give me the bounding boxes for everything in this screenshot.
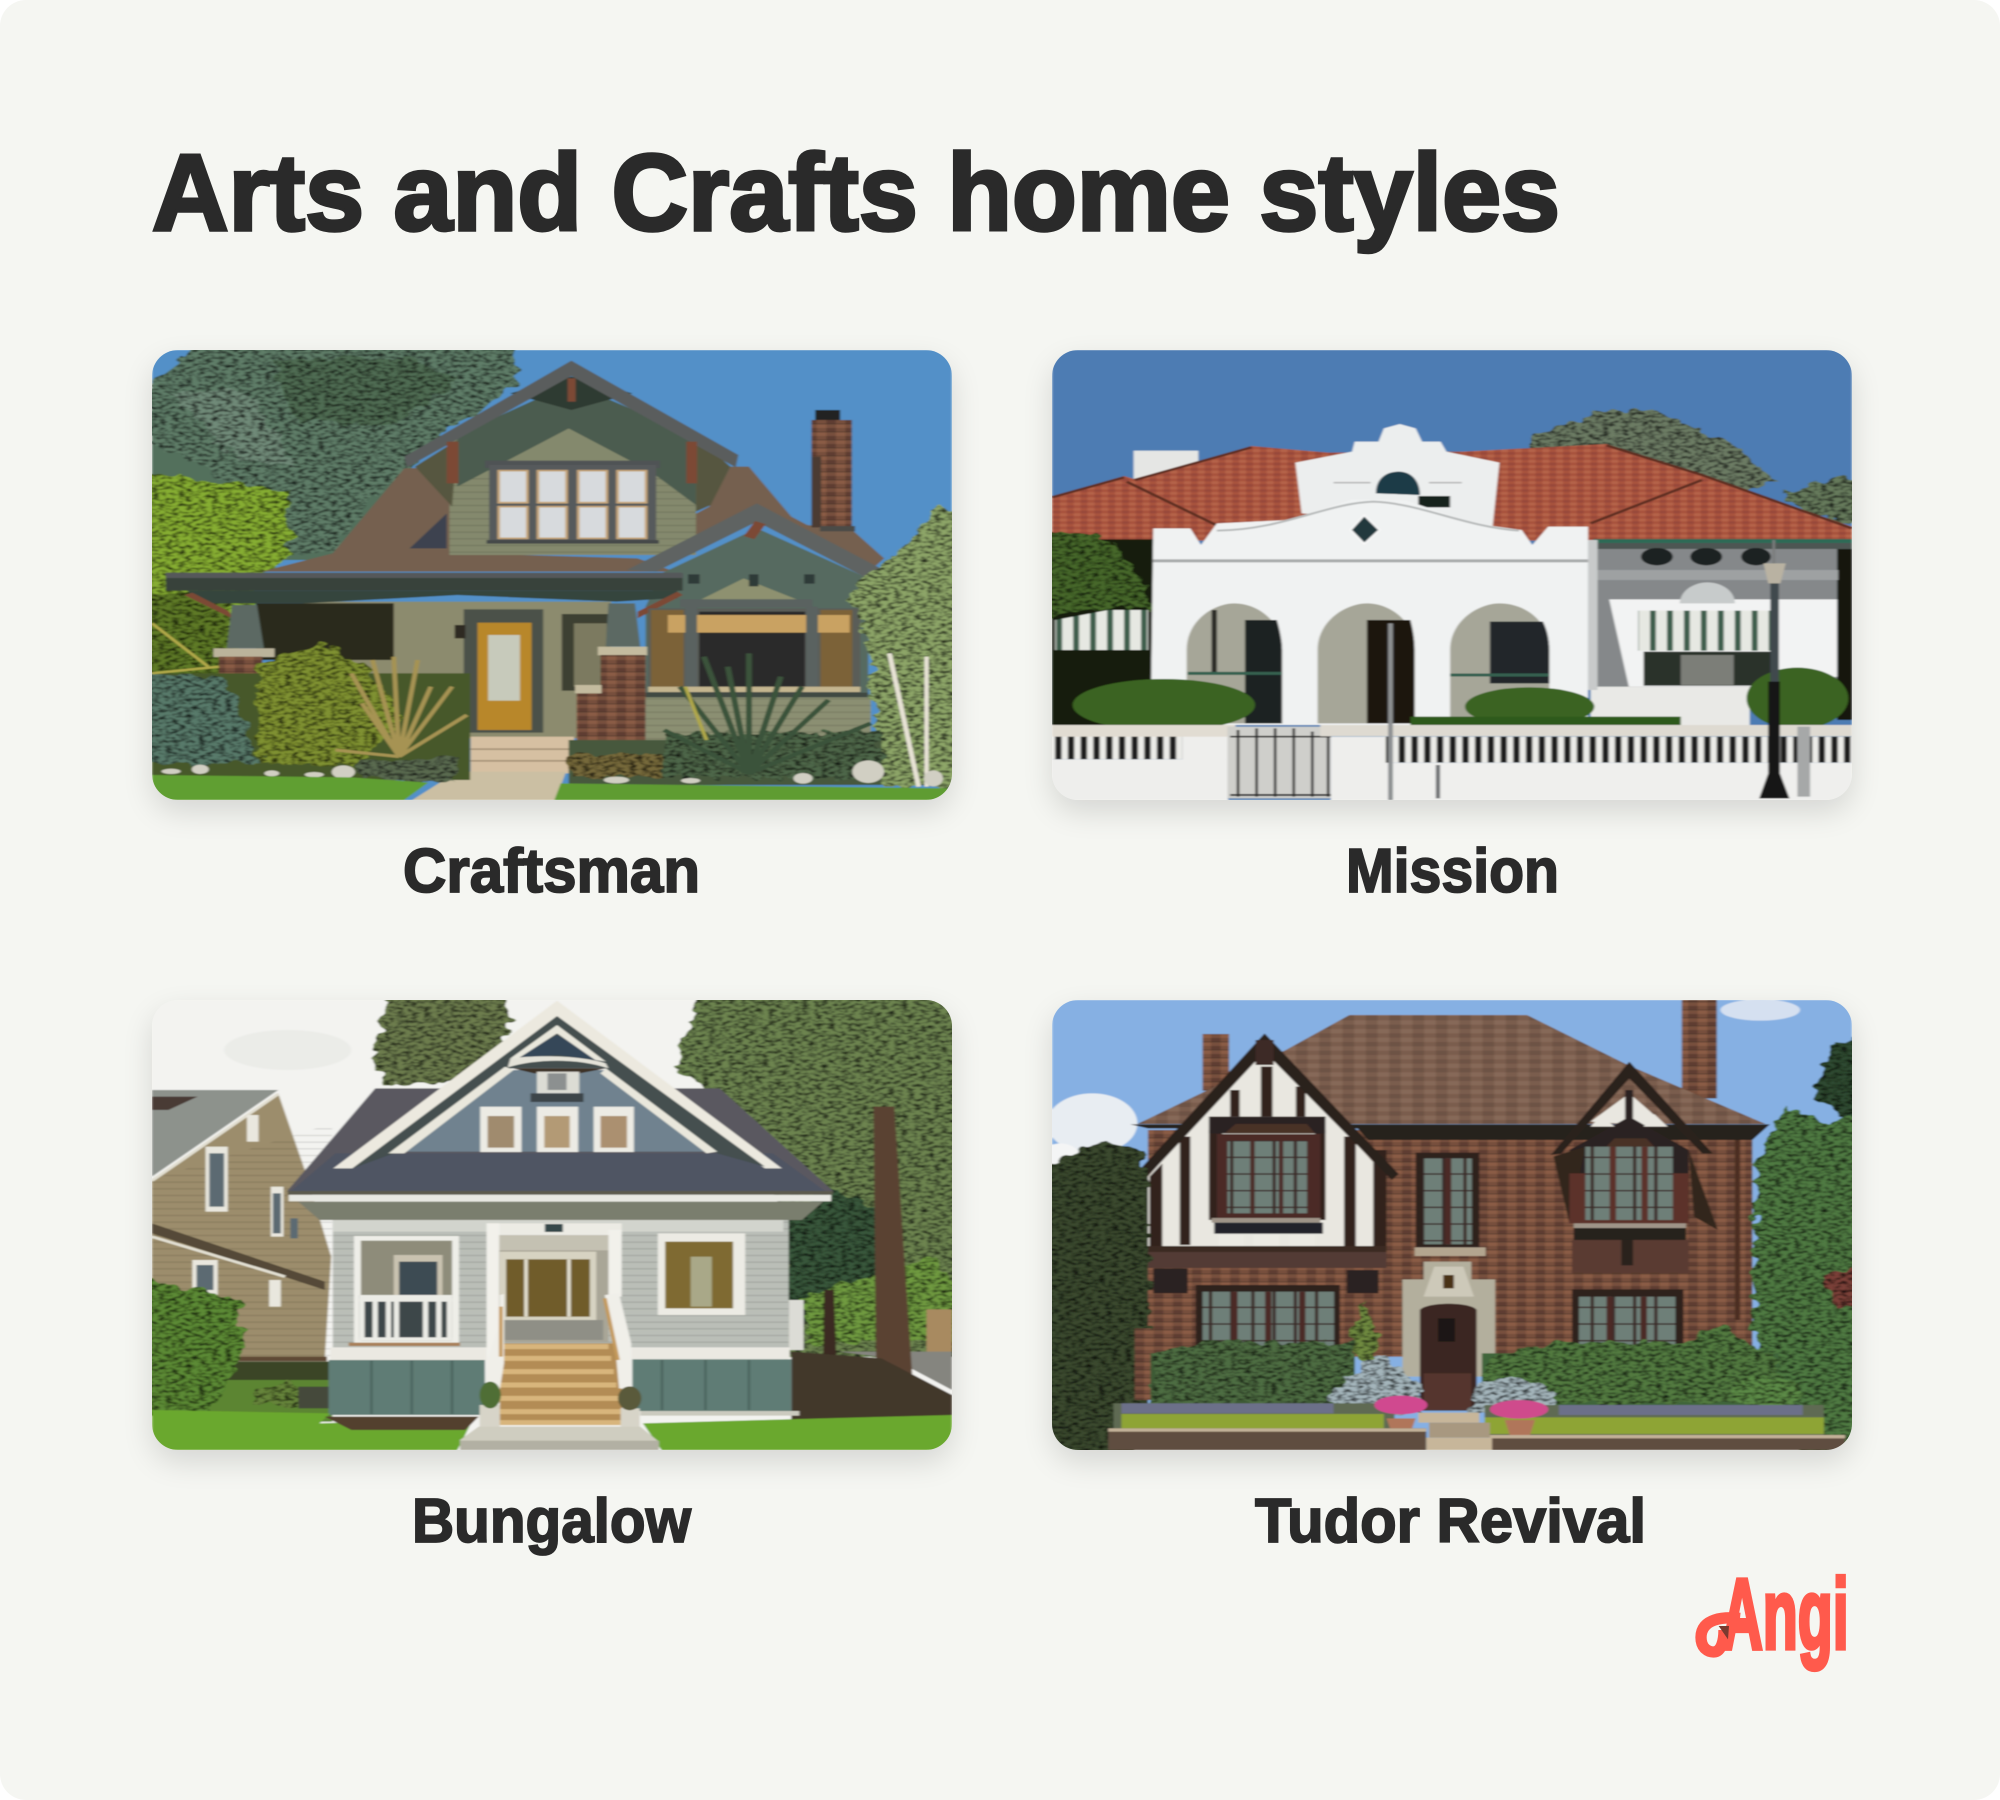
sky and clouds	[1039, 999, 1852, 1450]
main roof	[261, 467, 675, 572]
logo: Angi	[1695, 1559, 1849, 1672]
right lower window	[1572, 1289, 1683, 1349]
white balustrade wall	[1052, 725, 1852, 800]
pine trunk	[874, 1107, 912, 1375]
flower pots	[480, 1382, 641, 1428]
main gable	[333, 1001, 782, 1168]
gable windows	[480, 1072, 634, 1152]
right gable	[1551, 1062, 1718, 1230]
ground	[791, 1352, 952, 1421]
green bush left	[134, 473, 293, 707]
right upper window	[1569, 1147, 1689, 1273]
left gable window	[1212, 1134, 1323, 1246]
lawn left bushes	[129, 1277, 332, 1422]
photo: Craftsman house	[152, 350, 952, 800]
stone wall and steps	[1108, 1413, 1845, 1450]
label: Bungalow: Bungalow	[412, 1487, 692, 1556]
background trees	[1527, 410, 1888, 527]
lower left window	[1196, 1285, 1340, 1348]
photo: Bungalow house	[152, 1000, 952, 1450]
entrance surround	[1402, 1262, 1495, 1411]
grass and concrete walk	[152, 1410, 952, 1450]
eucalyptus tree	[145, 343, 516, 560]
shrubs	[1151, 1300, 1800, 1413]
right gable	[627, 503, 887, 698]
fence and road	[839, 1309, 952, 1390]
lamp post and sign posts	[1388, 540, 1810, 800]
label: Mission: Mission	[1346, 837, 1559, 906]
left palm and awning	[1034, 532, 1154, 726]
shrubs	[1073, 668, 1848, 731]
porch columns	[213, 603, 647, 747]
dormer windows	[485, 461, 660, 544]
right window	[658, 1233, 745, 1315]
porch roof	[166, 573, 683, 618]
wooden stairs	[485, 1293, 631, 1425]
white chimney	[1134, 451, 1198, 481]
trees	[373, 990, 988, 1357]
trees	[1023, 1037, 1888, 1463]
centre window	[1415, 1153, 1486, 1256]
photo: Tudor Revival house	[1052, 1000, 1852, 1450]
skirting	[329, 1347, 799, 1416]
sky	[1052, 350, 1852, 800]
sky	[152, 350, 952, 800]
logo: Angi: Angi	[1721, 1559, 1849, 1671]
roof	[287, 1088, 834, 1192]
label: Craftsman: Craftsman	[403, 837, 700, 906]
upper gable	[404, 361, 738, 555]
timber band	[1148, 1246, 1387, 1293]
chimney	[812, 410, 855, 531]
flower bed	[1113, 1396, 1824, 1437]
siding wall	[333, 1220, 804, 1350]
left porch	[349, 1236, 460, 1346]
neighbouring house	[152, 1090, 332, 1361]
label: Tudor Revival: Tudor Revival	[1255, 1487, 1646, 1556]
garden plants	[134, 623, 881, 785]
chimneys	[1203, 1000, 1717, 1098]
brick pier	[1135, 1328, 1152, 1400]
tile roof	[1052, 444, 1852, 541]
sky	[152, 1000, 952, 1450]
steps and walk	[412, 737, 574, 800]
right birch tree	[850, 503, 988, 787]
lawn	[152, 760, 952, 800]
eave	[288, 1191, 833, 1220]
eave	[1130, 1124, 1770, 1140]
hip roof	[1137, 1015, 1766, 1124]
bay window	[646, 599, 871, 754]
porch wall and door	[256, 602, 611, 738]
white parapet	[1151, 424, 1598, 725]
right wing	[1591, 539, 1852, 728]
brick walls	[1148, 1130, 1752, 1357]
left half-timbered gable	[1136, 1033, 1399, 1247]
title: Arts and Crafts home styles	[152, 132, 1560, 254]
striped awning	[1638, 611, 1771, 651]
photo: Mission house	[1052, 350, 1852, 800]
arches	[1187, 603, 1549, 723]
centre entry	[487, 1223, 622, 1363]
